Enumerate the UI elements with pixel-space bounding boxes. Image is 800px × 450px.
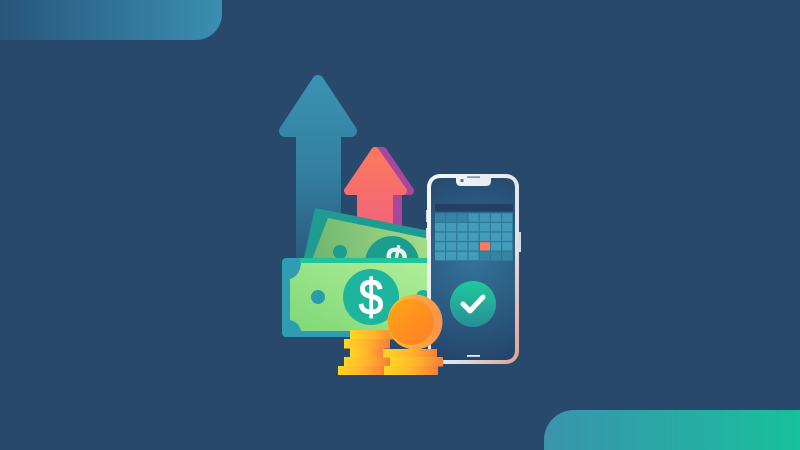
calendar grid (435, 212, 513, 261)
front banknote: $ (359, 268, 383, 325)
calendar header (435, 204, 513, 212)
red arrow with purple shadow (348, 151, 410, 228)
bottom right banner (544, 410, 800, 450)
top left banner (0, 0, 222, 40)
coin shadow (396, 344, 428, 349)
front banknote (282, 258, 432, 337)
phone screen (431, 178, 515, 360)
back banknote (304, 208, 427, 258)
home indicator (467, 355, 480, 357)
phone side buttons (426, 210, 521, 252)
tall blue arrow (285, 81, 351, 258)
check badge (450, 281, 496, 327)
camera and speaker (460, 176, 480, 182)
left coin stack (338, 330, 398, 375)
right coin stack (383, 349, 443, 375)
large orange coin (388, 294, 442, 350)
smartphone (426, 174, 521, 364)
highlighted calendar day (480, 242, 490, 250)
back banknote: $ (379, 237, 411, 292)
phone frame (427, 174, 519, 364)
